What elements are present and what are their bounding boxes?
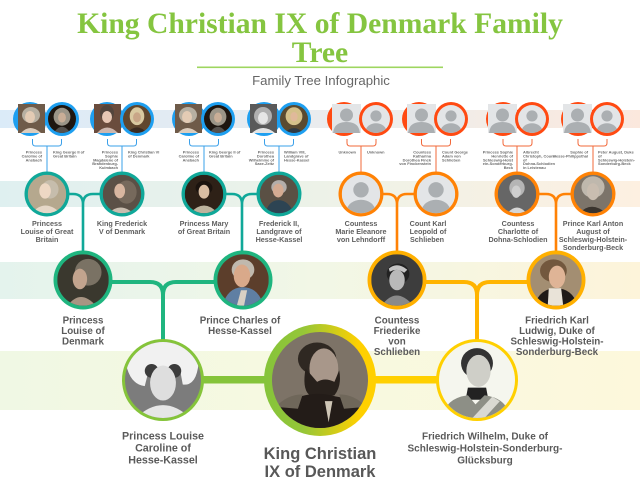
row 2 name labels: Leopold of <box>410 227 447 236</box>
bottom names: Princess Louise Caroline: Princess Louise <box>122 430 204 442</box>
row 1 name labels: Schleswig-Holstein- <box>598 157 636 162</box>
row 1 name labels: Sophie of <box>570 150 589 154</box>
title underline <box>197 66 443 68</box>
row 1 name labels: Ansbach <box>183 157 200 162</box>
row 3 name labels: Schlieben <box>374 347 420 358</box>
row 2: Frederick II <box>256 172 302 216</box>
row 2 name labels: Sonderburg-Beck <box>563 243 623 252</box>
row 3 name labels: Ludwig, Duke of <box>519 326 596 337</box>
row 1: Sophie Henriette and Albrecht <box>486 102 549 139</box>
row 2: Countess Marie Eleanore <box>338 172 384 216</box>
row 1 name labels: Peter August, Duke <box>598 150 635 154</box>
row 1: Katharina and George Adam <box>402 102 468 139</box>
row 2 name labels: Countess <box>502 219 534 228</box>
row 3 name labels: von <box>388 336 406 348</box>
row 1 name labels: Beck <box>504 165 514 170</box>
row 3 name labels <box>61 316 604 358</box>
connector: yellow to king <box>370 376 440 384</box>
bottom names: Friedrich Wilhelm: Friedrich Wilhelm, Duke of <box>422 432 549 442</box>
row 2 name labels: Countess <box>345 219 377 228</box>
row 1 name labels: Magdalene of <box>93 157 119 162</box>
row 1 name labels: Brandenburg- <box>92 161 119 166</box>
row 3 name labels: Hesse-Kassel <box>208 326 272 337</box>
row 1 name labels: of <box>598 153 602 158</box>
row 2 name labels: Louise of Great <box>21 227 74 236</box>
connectors: grandparents <box>69 194 571 254</box>
row 1 name labels: Dohna-Schlodien <box>523 161 556 166</box>
row 2 name labels: Princess Mary <box>180 219 228 228</box>
row 2: Princess Louise of Great Britain <box>24 172 70 216</box>
row 1 name labels: King Christian VI <box>128 150 159 154</box>
row 1 name labels: King George II of <box>209 150 241 154</box>
title: Tree <box>292 37 348 69</box>
row 2 name labels: von Lehndorff <box>337 235 386 244</box>
row 1 name labels: in Leistenau <box>523 165 546 170</box>
title <box>77 8 563 69</box>
row 1 name labels: Adam von <box>442 153 461 158</box>
row 1 name labels: Schlieben <box>442 157 461 162</box>
generation bands <box>0 110 640 410</box>
row 3 name labels: Friederike <box>374 326 421 337</box>
row 1 name labels: Schleswig-Holst <box>483 157 514 162</box>
connector: green to king <box>200 376 270 384</box>
row 1: Sophie Magdalene and Christian VI <box>90 102 154 136</box>
row 2 name labels: Charlotte of <box>498 227 539 236</box>
row 3 name labels: Friedrich Karl <box>525 316 589 326</box>
row 3: Friedrich Karl Ludwig <box>526 250 586 310</box>
bottom names: King Christian IX: King Christian <box>264 445 376 463</box>
row 1 name labels: Henriette of <box>491 153 514 158</box>
row 2: King Frederick V <box>100 172 144 216</box>
row 3: Princess Louise of Denmark <box>54 250 112 310</box>
connectors: great-grandparent brackets <box>32 139 607 173</box>
row 1 name labels: Princess Sophie <box>483 150 514 154</box>
row 3: Prince Charles of Hesse-Kassel <box>214 250 272 310</box>
row 1 name labels: Hesse-Kassel <box>284 157 309 162</box>
row 1 name labels: Princess <box>258 150 274 154</box>
bottom names: Friedrich Wilhelm: Glücksburg <box>457 456 513 466</box>
row 3: Countess Friederike <box>368 250 426 310</box>
row 3 name labels: Prince Charles of <box>200 316 281 326</box>
row 3 name labels: Louise of <box>61 326 106 337</box>
row 1 name labels: of Denmark <box>128 153 150 158</box>
row 1 name labels: Dorothea <box>257 153 275 158</box>
row 1 name labels: Sophie <box>105 153 119 158</box>
title: King Christian IX of Denmark Family <box>77 8 563 40</box>
row 1: Caroline and George II <box>13 102 79 136</box>
row 1 name labels: Albrecht <box>523 150 539 154</box>
row 1 name labels: Christoph, Count <box>523 153 555 158</box>
row 1 name labels: Princess <box>102 150 118 154</box>
row 1 name labels: Unknown <box>338 150 357 154</box>
row 2 name labels: August of <box>576 227 610 236</box>
row 2 name labels: Schleswig-Holstein- <box>559 235 628 244</box>
row 2: Prince Karl Anton August <box>570 172 616 216</box>
row 1 name labels: Hesse-Philippsthal <box>553 153 588 158</box>
row 2 name labels: King Frederick <box>97 219 147 228</box>
bottom names: Friedrich Wilhelm: Schleswig-Holstein-Sonderburg- <box>407 444 563 454</box>
row 1 name labels: Count George <box>442 150 469 154</box>
row 1 name labels: Dorothea Finck <box>403 157 432 162</box>
row 2: Princess Mary of Great Britain <box>182 172 226 216</box>
row 4: Friedrich Wilhelm portrait <box>436 339 518 421</box>
row 2 name labels: Count Karl <box>410 219 446 228</box>
row 1: unknown couple <box>327 102 393 139</box>
row 1 name labels: Unknown <box>367 150 385 154</box>
row 3 name labels: Countess <box>375 316 420 326</box>
row 2: Count Karl Leopold <box>414 172 458 216</box>
row 3 name labels: Schleswig-Holstein- <box>510 336 604 348</box>
row 2 name labels: Marie Eleanore <box>335 227 387 236</box>
row 1 name labels: Princess <box>183 150 199 154</box>
row 1: Sophie and Peter August <box>561 102 624 139</box>
subtitle: Family Tree Infographic <box>252 73 390 88</box>
row 2: Countess Charlotte <box>494 172 540 216</box>
row 1 name labels: Saxe-Zeitz <box>255 161 274 166</box>
row 2 name labels: Frederick II, <box>259 219 299 228</box>
row 4: King Christian IX portrait <box>264 324 376 436</box>
row 1 name labels: Great Britain <box>209 153 233 158</box>
row 3 name labels: Princess <box>63 316 104 326</box>
bottom names: Princess Louise Caroline: Caroline of <box>135 442 191 454</box>
row 2 name labels: Hesse-Kassel <box>256 235 302 244</box>
row 1 name labels: King George II of <box>53 150 85 154</box>
row 2 name labels <box>21 219 628 252</box>
row 1 name labels: Caroline of <box>22 153 43 158</box>
row 1 name labels: Caroline of <box>179 153 200 158</box>
row 4: Princess Louise Caroline portrait <box>122 339 204 421</box>
row 1 name labels: Ansbach <box>26 157 43 162</box>
row 1 name labels: Countess <box>413 150 431 154</box>
row 2 name labels: V of Denmark <box>99 227 145 236</box>
row 1: Dorothea and William VIII <box>247 102 311 136</box>
row 2 name labels: Princess <box>32 219 62 228</box>
bottom names: Princess Louise Caroline: Hesse-Kassel <box>128 454 198 466</box>
row 1 name labels: Wilhelmine of <box>249 157 275 162</box>
row 1 name labels: Landgrave of <box>284 153 309 158</box>
row 1: Caroline and George II, second branch <box>172 102 235 136</box>
row 2 name labels: of Great Britain <box>178 227 230 236</box>
row 2 name labels: Prince Karl Anton <box>563 219 623 228</box>
row 1 name labels: Princess <box>26 150 42 154</box>
row 3 name labels: Denmark <box>62 336 105 348</box>
connectors: parents <box>112 282 528 345</box>
row 2 name labels: Britain <box>36 235 58 244</box>
row 1 name labels: von Finckenstein <box>399 161 432 166</box>
row 2 name labels: Dohna-Schlodien <box>488 235 548 244</box>
row 3 name labels: Sonderburg-Beck <box>516 347 599 358</box>
row 1 name labels <box>22 150 636 170</box>
row 1 name labels: Great Britain <box>53 153 77 158</box>
bottom names: King Christian IX: IX of Denmark <box>265 463 376 481</box>
row 1 name labels: Sonderburg-Beck <box>598 161 631 166</box>
row 1 name labels: Kulmbach <box>99 165 119 170</box>
row 1 name labels: William VIII, <box>284 150 306 154</box>
row 1 name labels: ein-Sonderburg- <box>483 161 514 166</box>
row 1 name labels: Katharina <box>413 153 432 158</box>
row 2 name labels: Schlieben <box>410 235 444 244</box>
row 2 name labels: Landgrave of <box>256 227 302 236</box>
row 1 name labels: of <box>523 157 527 162</box>
